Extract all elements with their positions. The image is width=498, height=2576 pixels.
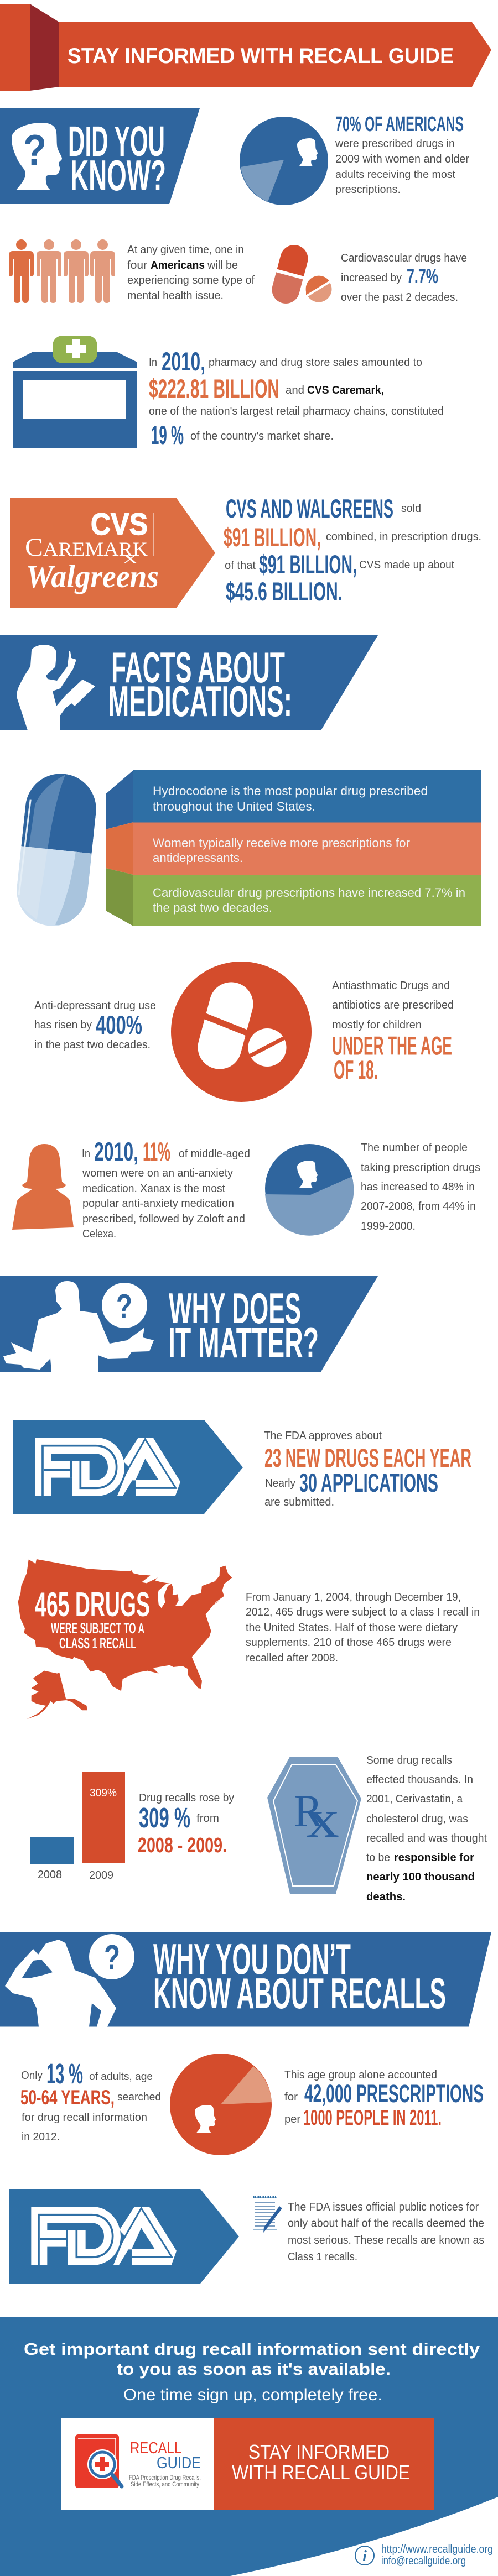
text: antiasthmatic drugs: Antiasthmatic Drugs and	[332, 980, 450, 992]
text: middle-aged women: prescribed, followed by Zoloft and	[82, 1213, 245, 1225]
map label	[35, 1586, 150, 1652]
section heading: facts about medications	[0, 635, 378, 730]
text: number of people taking prescriptions	[361, 1142, 480, 1232]
text: cardiovascular drugs: over the past 2 decades.	[341, 291, 458, 304]
heading text	[108, 643, 292, 725]
section heading: did you know	[0, 108, 200, 204]
icon: information circle: i	[362, 2548, 367, 2565]
logo wordmark: FDA Prescription Drug Recalls,	[129, 2474, 201, 2481]
text: middle-aged women	[82, 1137, 250, 1240]
logo wordmark: RECALL	[130, 2439, 181, 2457]
text: FDA approvals	[264, 1430, 471, 1508]
text: CVS and Walgreens sales: $91 BILLION,	[224, 522, 321, 552]
text: 70 percent of Americans: 2009 with women and older	[335, 153, 469, 165]
text: 42,000 prescriptions: per	[284, 2113, 300, 2125]
text: antiasthmatic drugs: mostly for children	[332, 1019, 422, 1031]
icon: head with question mark: ?	[23, 126, 46, 174]
icon: capsule and tablet	[269, 242, 333, 307]
text: anti-depressant use: 400%	[96, 1010, 142, 1039]
text: number of people taking prescriptions: The number of people	[361, 1142, 468, 1154]
text: Cerivastatin recall: recalled and was thought	[366, 1832, 487, 1845]
pie chart: people taking prescription drugs	[265, 1144, 354, 1236]
text: class 1 recalls: 2012, 465 drugs were subject to a class I recall in	[246, 1606, 480, 1618]
text: middle-aged women: women were on an anti-anxiety	[82, 1167, 233, 1179]
text: CVS and Walgreens sales	[224, 494, 481, 606]
text: middle-aged women: popular anti-anxiety medication	[82, 1198, 234, 1210]
text: FDA public notices: The FDA issues official public notices for	[288, 2201, 479, 2213]
text: 70 percent of Americans: were prescribed drugs in	[335, 138, 455, 150]
icon: woman silhouette	[12, 1144, 74, 1230]
text: one in four Americans: Americans	[151, 259, 205, 271]
text: middle-aged women: medication. Xanax is the most	[82, 1183, 225, 1195]
Rx mark: x	[122, 547, 138, 568]
call to action heading	[24, 2339, 480, 2379]
fact: hydrocodone: Hydrocodone is the most popular drug prescribed	[153, 784, 428, 798]
text: Cerivastatin recall: effected thousands. In	[366, 1774, 473, 1786]
heading text: KNOW?	[70, 151, 166, 200]
section heading: why you don't know about recalls	[0, 1932, 491, 2027]
text: number of people taking prescriptions: has increased to 48% in	[361, 1181, 475, 1193]
text: CVS and Walgreens sales: sold	[401, 503, 421, 515]
Walgreens logo text: Walgreens	[26, 558, 159, 594]
text: CVS and Walgreens sales: of that	[225, 560, 256, 572]
title banner	[0, 4, 491, 91]
text: 13 percent of adults: in 2012.	[22, 2131, 60, 2143]
logo wordmark: GUIDE	[157, 2454, 201, 2472]
text: 42,000 prescriptions	[284, 2069, 484, 2130]
text: middle-aged women: 2010,	[94, 1137, 138, 1166]
fact: women and antidepressants: antidepressants.	[153, 851, 243, 865]
text: number of people taking prescriptions: taking prescription drugs	[361, 1162, 480, 1174]
subheading: One time sign up, completely free.	[123, 2386, 382, 2404]
heading text: DID YOU	[68, 118, 165, 165]
title text: STAY INFORMED WITH RECALL GUIDE	[68, 44, 454, 68]
map label: WERE SUBJECT TO A	[51, 1620, 144, 1637]
text: 13 percent of adults: of adults, age	[89, 2071, 153, 2083]
text: Cerivastatin recall: nearly 100 thousand	[366, 1871, 475, 1883]
text: 70 percent of Americans: prescriptions.	[335, 184, 401, 196]
text: pharmacy sales: CVS Caremark,	[307, 384, 384, 396]
pie chart: 70 percent of Americans	[240, 117, 328, 205]
bar chart: recalls 2008 to 2009: 309%	[90, 1787, 117, 1799]
text: anti-depressant use: has risen by	[34, 1019, 92, 1031]
heading text	[168, 1284, 319, 1367]
icon: four people	[9, 239, 115, 303]
FDA logo	[35, 1438, 180, 1497]
text: class 1 recalls	[246, 1591, 480, 1664]
text: 13 percent of adults: for drug recall information	[22, 2112, 147, 2124]
text: one in four Americans: At any given time, one in	[127, 244, 244, 256]
text: 42,000 prescriptions: for	[284, 2091, 298, 2103]
text: anti-depressant use: in the past two decades.	[34, 1039, 151, 1051]
call to action heading: Get important drug recall information sent directly	[24, 2339, 480, 2359]
text: middle-aged women: In	[82, 1148, 90, 1160]
text: FDA public notices: most serious. These recalls are known as	[288, 2234, 484, 2246]
call to action heading: to you as soon as it's available.	[117, 2359, 391, 2379]
text: 13 percent of adults	[20, 2058, 161, 2143]
text: pharmacy sales: $222.81 BILLION	[149, 374, 279, 403]
bar chart: recalls 2008 to 2009: 2009	[89, 1869, 113, 1882]
text: 70 percent of Americans	[335, 113, 469, 196]
text: middle-aged women: of middle-aged	[179, 1148, 250, 1160]
text: cardiovascular drugs: 7.7%	[407, 265, 438, 288]
text: cardiovascular drugs: Cardiovascular drugs have	[341, 252, 467, 264]
icon: pills in red circle	[171, 962, 312, 1102]
text: CVS and Walgreens sales: combined, in prescription drugs.	[326, 531, 481, 543]
text: recalls rose	[138, 1792, 234, 1857]
icon: man saluting	[5, 1940, 116, 2027]
icon: information circle	[355, 2546, 374, 2565]
fact: hydrocodone	[106, 770, 481, 829]
text: number of people taking prescriptions: 1999-2000.	[361, 1220, 416, 1232]
text: Cerivastatin recall: deaths.	[366, 1891, 406, 1903]
text: Cerivastatin recall: 2001, Cerivastatin, a	[366, 1793, 463, 1805]
text: cardiovascular drugs: increased by	[341, 272, 402, 284]
text: anti-depressant use: Anti-depressant drug use	[34, 1000, 156, 1012]
panel: three medication facts	[106, 770, 481, 926]
panel: footer call to action	[0, 2317, 498, 2576]
icon: notepad and pen	[253, 2197, 282, 2233]
pie chart: 13 percent	[170, 2054, 272, 2155]
text: 13 percent of adults: 50-64 YEARS,	[20, 2086, 115, 2109]
fact: cardiovascular prescriptions	[106, 868, 481, 926]
map label: CLASS 1 RECALL	[59, 1635, 136, 1652]
button: stay informed: STAY INFORMED	[248, 2441, 390, 2463]
text: 13 percent of adults: searched	[117, 2091, 161, 2103]
icon: coffin with Rx	[267, 1757, 361, 1894]
text: pharmacy sales: pharmacy and drug store sales amounted to	[209, 357, 422, 369]
fact: hydrocodone: throughout the United States.	[153, 800, 315, 813]
text: class 1 recalls: From January 1, 2004, through December 19,	[246, 1591, 461, 1603]
text: recalls rose: 2008 - 2009.	[138, 1834, 227, 1857]
fact: cardiovascular prescriptions: the past two decades.	[153, 901, 272, 915]
text: Cerivastatin recall: cholesterol drug, was	[366, 1813, 468, 1825]
icon: coffin with Rx: x	[307, 1789, 339, 1849]
heading text: FACTS ABOUT	[111, 643, 285, 692]
text: recalls rose: 309 %	[139, 1802, 190, 1833]
text: CVS and Walgreens sales: CVS made up about	[359, 559, 454, 571]
text: cardiovascular drugs	[341, 252, 467, 304]
icon: head with question mark	[12, 123, 62, 190]
text: FDA public notices: only about half of the recalls deemed the	[288, 2217, 484, 2229]
text: recalls rose: from	[196, 1812, 219, 1825]
text: anti-depressant use	[34, 1000, 156, 1051]
text: FDA public notices	[288, 2201, 484, 2263]
map label: 465 DRUGS	[35, 1586, 150, 1624]
panel: FDA logo flag	[9, 2189, 239, 2284]
text: 13 percent of adults: Only	[21, 2070, 43, 2082]
text: Cerivastatin recall: Some drug recalls	[366, 1754, 452, 1767]
icon: question bubble: ?	[104, 1937, 120, 1977]
text: one in four Americans: will be	[207, 259, 238, 271]
icon: large capsule	[17, 774, 96, 926]
fact: cardiovascular prescriptions: Cardiovascular drug prescriptions have increased 7.7% in	[153, 886, 465, 900]
text: 70 percent of Americans: adults receiving the most	[335, 169, 455, 181]
text: 13 percent of adults: 13 %	[46, 2058, 83, 2089]
text: FDA approvals: The FDA approves about	[264, 1430, 382, 1442]
heading text: IT MATTER?	[168, 1318, 319, 1367]
text: class 1 recalls: the United States. Half of those were dietary	[246, 1622, 458, 1634]
text: number of people taking prescriptions: 2007-2008, from 44% in	[361, 1200, 476, 1213]
heading text	[68, 118, 166, 200]
text: one in four Americans: four	[127, 259, 147, 271]
text: pharmacy sales: 2010,	[162, 347, 205, 376]
text: pharmacy sales: 19 %	[151, 420, 184, 450]
text: one in four Americans: experiencing some type of	[127, 274, 255, 286]
icon: question bubble	[89, 1934, 134, 1979]
Caremark logo text: CAREMARK	[25, 533, 148, 562]
text: pharmacy sales	[149, 347, 444, 450]
text: middle-aged women: Celexa.	[82, 1228, 116, 1240]
text: 42,000 prescriptions: This age group alone accounted	[284, 2069, 437, 2081]
bar chart: recalls 2008 to 2009	[30, 1772, 125, 1882]
text: contact details: info@recallguide.org	[381, 2555, 466, 2567]
map: United States and Alaska	[18, 1559, 232, 1719]
icon: coffin with Rx: R	[294, 1785, 323, 1837]
text: CVS and Walgreens sales: $91 BILLION,	[259, 550, 357, 579]
Recall Guide logo panel	[61, 2418, 214, 2510]
text: antiasthmatic drugs	[332, 980, 454, 1084]
heading text: MEDICATIONS:	[108, 677, 292, 725]
bar chart: recalls 2008 to 2009: 2008	[38, 1869, 62, 1881]
text: FDA approvals: are submitted.	[264, 1496, 334, 1508]
text: FDA public notices: Class 1 recalls.	[288, 2251, 357, 2263]
text: pharmacy sales: In	[149, 357, 157, 369]
icon: question bubble: ?	[116, 1288, 132, 1326]
text: pharmacy sales: one of the nation's largest retail pharmacy chains, constituted	[149, 405, 444, 417]
icon: question bubble	[102, 1283, 147, 1328]
text: contact details	[381, 2543, 493, 2567]
text: pharmacy sales: and	[286, 384, 304, 396]
heading text: WHY YOU DON’T	[153, 1935, 351, 1983]
icon: pharmacy store	[13, 336, 137, 448]
text: FDA approvals: Nearly	[265, 1477, 295, 1490]
text: pharmacy sales: of the country's market share.	[190, 430, 334, 442]
text: Cerivastatin recall	[366, 1754, 487, 1903]
text: recalls rose: Drug recalls rose by	[139, 1792, 234, 1804]
fact: women and antidepressants	[106, 822, 481, 875]
text: CVS and Walgreens sales: $45.6 BILLION.	[226, 577, 343, 606]
section heading: why does it matter	[0, 1276, 378, 1372]
text: antiasthmatic drugs: OF 18.	[334, 1055, 378, 1084]
text: Cerivastatin recall: responsible for	[394, 1852, 474, 1864]
heading text	[153, 1935, 446, 2018]
button: stay informed: WITH RECALL GUIDE	[232, 2461, 410, 2484]
heading text: WHY DOES	[169, 1284, 301, 1333]
panel: FDA logo flag	[13, 1420, 243, 1514]
text: antiasthmatic drugs: antibiotics are prescribed	[332, 999, 454, 1011]
text: class 1 recalls: supplements. 210 of those 465 drugs were	[246, 1637, 452, 1649]
icon: book with magnifier	[75, 2434, 122, 2488]
panel: CVS Caremark and Walgreens logos	[10, 498, 215, 608]
text: Cerivastatin recall: to be	[366, 1852, 390, 1864]
icon: man reading a label	[17, 645, 95, 730]
text: one in four Americans	[127, 244, 255, 302]
CVS logo text: CVS	[91, 506, 148, 541]
text: one in four Americans: mental health issue.	[127, 290, 224, 302]
text: class 1 recalls: recalled after 2008.	[246, 1652, 338, 1664]
icon: shrugging man	[3, 1281, 154, 1372]
FDA logo	[31, 2207, 177, 2266]
text: middle-aged women: 11%	[143, 1137, 170, 1166]
fact: women and antidepressants: Women typically receive more prescriptions for	[153, 836, 410, 850]
button: stay informed	[214, 2418, 434, 2510]
logo wordmark: Side Effects, and Community	[131, 2480, 199, 2488]
logo wordmark	[129, 2439, 201, 2488]
